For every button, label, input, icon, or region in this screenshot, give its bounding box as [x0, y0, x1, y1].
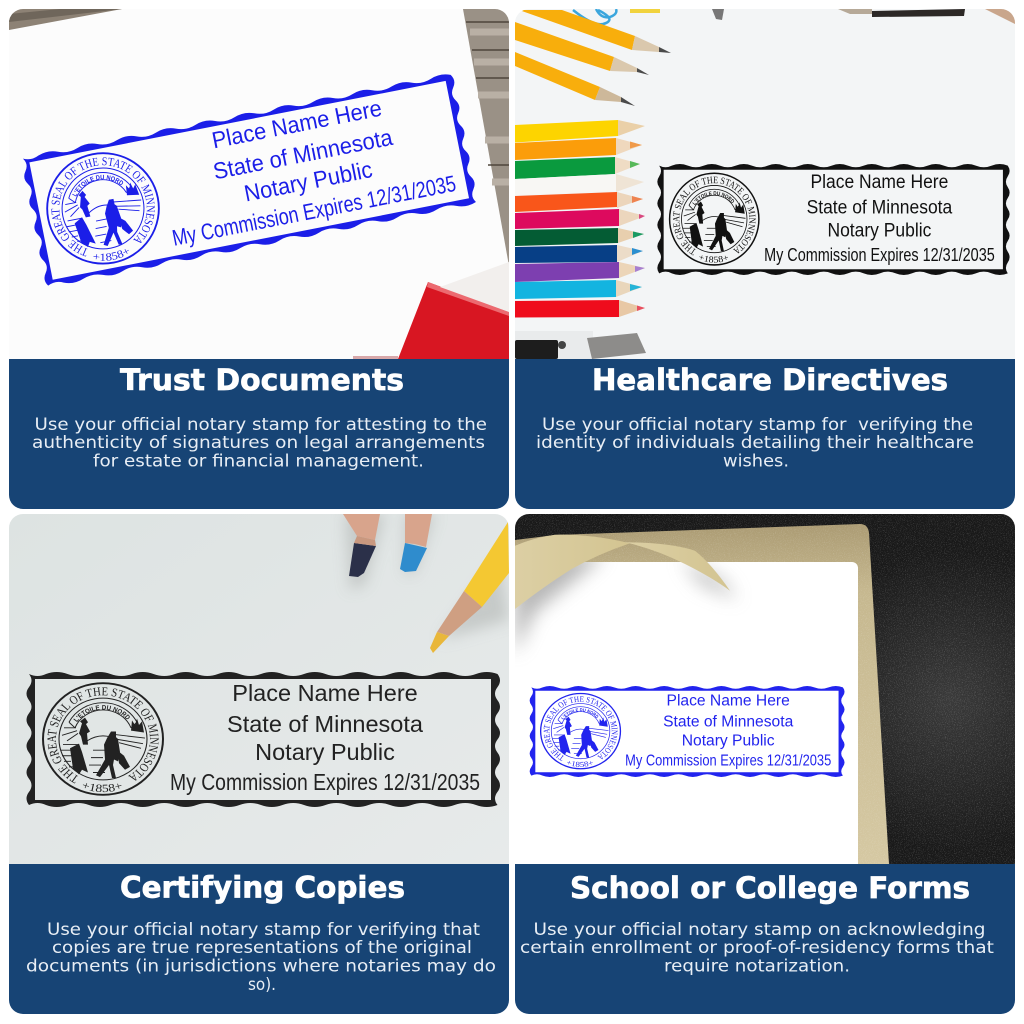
- description: authenticity of signatures on legal arrangements: [32, 433, 485, 453]
- seal: +1858+: [567, 761, 593, 767]
- footer background: [9, 359, 509, 509]
- stamp text: Notary Public: [827, 219, 931, 241]
- seal: THE GREAT SEAL OF THE STATE OF MINNESOTA: [672, 176, 756, 256]
- stamp: black notary stamp: [657, 164, 1010, 275]
- stamp text: My Commission Expires 12/31/2035: [170, 170, 458, 251]
- seal: L'ETOILE DU NORD: [560, 708, 598, 720]
- seal: L'ETOILE DU NORD: [692, 191, 734, 206]
- stamp text: [764, 170, 995, 265]
- stamp text: Notary Public: [242, 156, 375, 207]
- seal: L'ETOILE DU NORD: [72, 174, 124, 196]
- stamp text: State of Minnesota: [807, 195, 953, 218]
- photo: pencils on pale surface: [9, 514, 509, 864]
- stamp: black notary stamp: [26, 672, 500, 807]
- stamp text: [625, 692, 831, 770]
- stamp text: Notary Public: [255, 739, 395, 765]
- footer background: [515, 864, 1015, 1014]
- panel: school or college forms: [515, 514, 1015, 1014]
- footer background: [9, 864, 509, 1014]
- heading: School or College Forms: [570, 871, 970, 905]
- stamp text: My Commission Expires 12/31/2035: [625, 752, 831, 770]
- description: [32, 415, 487, 472]
- seal: THE GREAT SEAL OF THE STATE OF MINNESOTA: [51, 157, 155, 257]
- description: documents (in jurisdictions where notaries may do: [26, 956, 496, 976]
- description: [26, 920, 496, 995]
- seal: THE GREAT SEAL OF THE STATE OF MINNESOTA: [544, 696, 618, 762]
- stamp text: Notary Public: [682, 732, 775, 749]
- description: [536, 415, 974, 472]
- stamp text: State of Minnesota: [663, 713, 794, 730]
- description: Use your official notary stamp on acknowledging: [534, 920, 986, 940]
- panel: trust documents: [9, 9, 509, 509]
- stamp text: State of Minnesota: [227, 711, 424, 737]
- seal: L'ETOILE DU NORD: [73, 705, 130, 722]
- description: [520, 920, 994, 976]
- seal: +1858+: [94, 249, 129, 261]
- description: Use your official notary stamp for attesting to the: [34, 415, 487, 435]
- yellow pencils: [515, 10, 671, 106]
- description: wishes.: [723, 452, 789, 472]
- stamp text: [170, 680, 480, 795]
- stamp text: Place Name Here: [667, 692, 790, 710]
- stamp text: State of Minnesota: [211, 124, 395, 185]
- stamp text: Place Name Here: [232, 680, 418, 706]
- icon: gold ribbon: [515, 535, 730, 609]
- seal: THE GREAT SEAL OF THE STATE OF MINNESOTA: [47, 687, 159, 784]
- stamp: blue rotated notary stamp: [23, 74, 476, 286]
- panel: certifying copies: [9, 514, 509, 1014]
- photo: white card on gold folder and black board: [515, 514, 1015, 882]
- description: require notarization.: [664, 956, 850, 976]
- craft knife: [515, 331, 646, 359]
- heading: Trust Documents: [120, 363, 404, 397]
- description: certain enrollment or proof-of-residency forms that: [520, 938, 994, 958]
- stamp border: [26, 672, 500, 807]
- description: so).: [248, 975, 276, 995]
- coloured pencils: [515, 120, 645, 318]
- description: identity of individuals detailing their healthcare: [536, 433, 974, 453]
- footer background: [515, 359, 1015, 509]
- description: Use your official notary stamp for verifying the: [542, 415, 973, 435]
- photo: paper on wooden table: [9, 9, 509, 359]
- heading: Certifying Copies: [120, 870, 405, 904]
- photo: desk with pencils: [515, 9, 1015, 359]
- stamp border: [20, 73, 479, 288]
- description: for estate or financial management.: [93, 452, 424, 472]
- stamp border: [530, 686, 845, 777]
- description: copies are true representations of the original: [52, 938, 472, 958]
- panel: healthcare directives: [515, 9, 1015, 509]
- stamp: blue notary stamp: [530, 686, 844, 777]
- heading: Healthcare Directives: [592, 363, 948, 397]
- stamp text: [153, 84, 458, 251]
- description: Use your official notary stamp for verifying that: [47, 920, 480, 940]
- stamp text: Place Name Here: [810, 170, 948, 192]
- seal: +1858+: [699, 255, 728, 263]
- seal: +1858+: [82, 783, 122, 792]
- stamp border: [657, 164, 1010, 275]
- stamp text: Place Name Here: [210, 95, 384, 154]
